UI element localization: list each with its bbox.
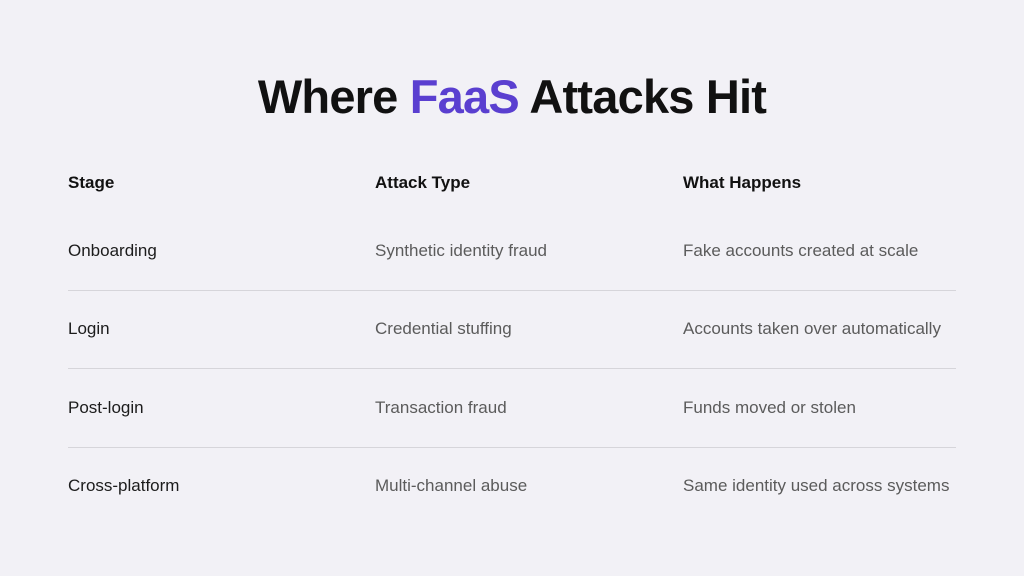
row: onboarding: Synthetic identity fraud — [375, 241, 547, 260]
row: onboarding: Onboarding — [68, 241, 157, 260]
row: post-login — [68, 398, 856, 417]
table header: What Happens — [683, 173, 801, 192]
row: cross-platform: Same identity used across systems — [683, 476, 949, 495]
row: post-login: Funds moved or stolen — [683, 398, 856, 417]
row: login — [68, 319, 941, 338]
row: login: Credential stuffing — [375, 319, 512, 338]
row: login: Login — [68, 319, 110, 338]
row: post-login: Transaction fraud — [375, 398, 507, 417]
row: post-login: Post-login — [68, 398, 144, 417]
row: login: Accounts taken over automatically — [683, 319, 941, 338]
title: Where FaaS Attacks Hit — [258, 70, 766, 123]
row: cross-platform — [68, 476, 949, 495]
table header — [68, 173, 801, 192]
row: cross-platform: Multi-channel abuse — [375, 476, 527, 495]
table header: Attack Type — [375, 173, 470, 192]
table header: Stage — [68, 173, 114, 192]
row: onboarding: Fake accounts created at scale — [683, 241, 918, 260]
row: cross-platform: Cross-platform — [68, 476, 179, 495]
row: onboarding — [68, 241, 918, 260]
